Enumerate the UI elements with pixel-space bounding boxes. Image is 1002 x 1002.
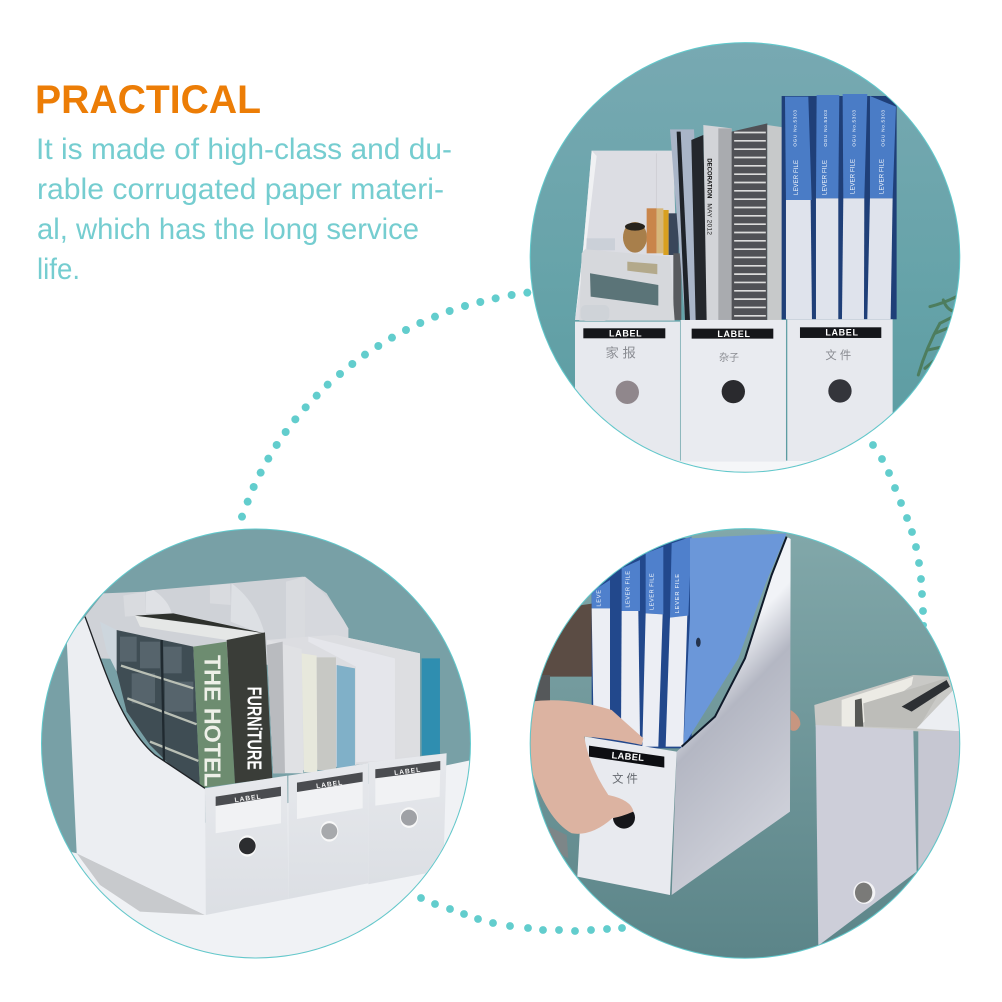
dotted arc: left circle to right circle [417, 894, 626, 935]
magazines: MAY 2012 [706, 203, 713, 235]
title: PRACTICAL [35, 78, 261, 122]
description text: al, which has the long service [37, 213, 419, 246]
floor [72, 760, 470, 958]
box front with label: LABEL [611, 750, 645, 763]
hand [530, 700, 643, 834]
box side [672, 537, 791, 895]
box fronts with labels: LABEL [316, 779, 344, 790]
box fronts with labels: LABEL [394, 767, 422, 777]
description text: rable corrugated paper materi- [37, 173, 444, 206]
blue lever binders: OGU No.5303 [793, 110, 798, 147]
description text: It is made of high-class and du- [36, 133, 452, 166]
front panels with labels: LABEL [717, 329, 751, 339]
blue lever binders: OGU No.5303 [852, 110, 857, 147]
blue lever binders: LEVER FILE [879, 159, 885, 194]
description text: life. [37, 253, 80, 286]
books [100, 613, 440, 788]
back dividers [85, 577, 348, 665]
blue lever binders: LEVER FILE [850, 159, 856, 194]
photo circle: file boxes on teal wall [530, 40, 970, 481]
books: THE HOTEL [199, 655, 225, 787]
front panels with labels: 杂子 [719, 352, 739, 364]
binders [592, 533, 787, 748]
binders: LEVER FILE [626, 571, 632, 608]
photo circle: hand lifting box [525, 525, 965, 965]
photo circle: white boxes with books [40, 525, 480, 965]
box front with label: 文 件 [612, 771, 638, 785]
blue lever binders: OGU No.5303 [880, 110, 885, 147]
front panels with labels: LABEL [825, 328, 859, 338]
blue lever binders: OGU No.5303 [823, 110, 828, 147]
binders: LEVER FILE [650, 573, 656, 610]
magazines: DECORATION [706, 158, 713, 198]
plant [918, 297, 957, 375]
box fronts with labels [205, 753, 447, 915]
magazines [670, 123, 783, 320]
right box with papers [814, 675, 965, 946]
description text [36, 133, 452, 286]
books: FURNiTURE [242, 687, 264, 770]
blue lever binders: LEVER FILE [822, 160, 828, 195]
box side panel [67, 617, 205, 915]
front panels with labels [575, 319, 893, 463]
box front with label [577, 737, 677, 895]
front panels with labels: LABEL [609, 329, 642, 339]
dotted arc: top circle to right circle [869, 441, 927, 628]
blue lever binders: LEVER FILE [794, 160, 800, 195]
left box contents [575, 151, 681, 321]
front panels with labels: 文 件 [825, 348, 851, 362]
binders: LEVE [596, 590, 602, 607]
blue lever binders [782, 94, 897, 319]
front panels with labels: 家 报 [605, 345, 636, 361]
dotted arc: top circle to left circle [238, 289, 531, 521]
binders: LEVER FILE [675, 574, 681, 613]
box fronts with labels: LABEL [234, 793, 262, 804]
